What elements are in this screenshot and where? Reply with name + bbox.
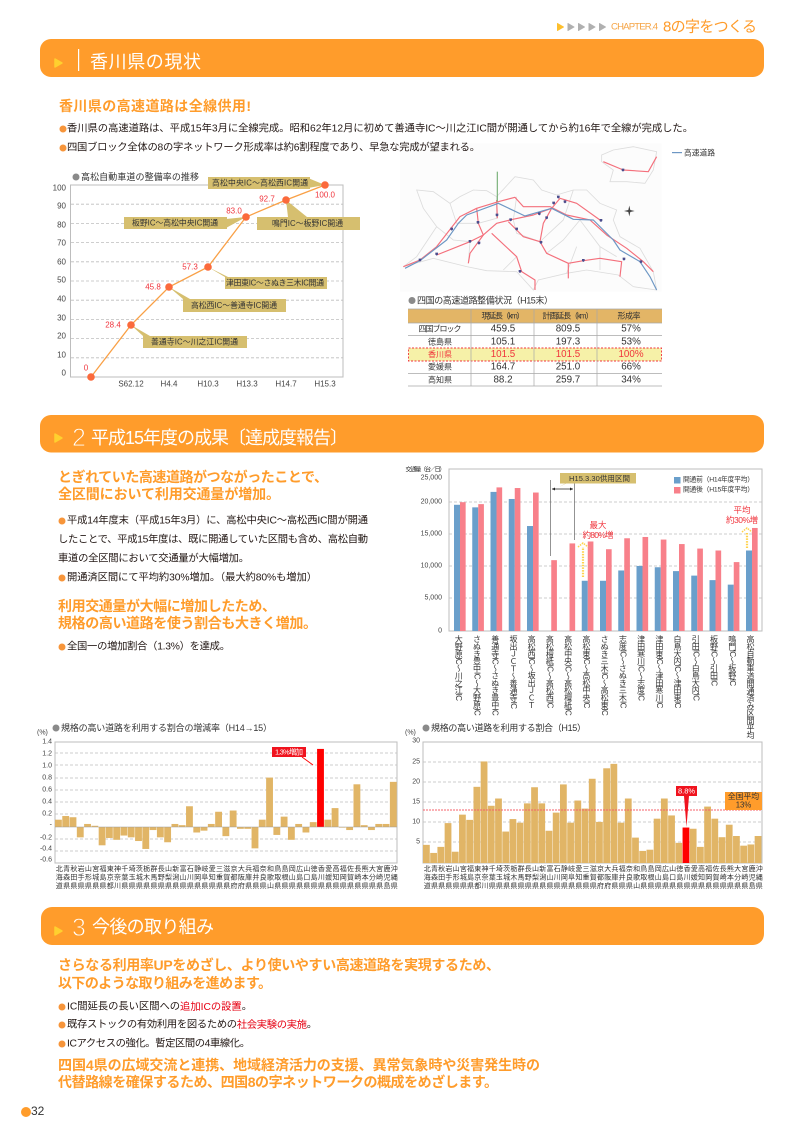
prefecture labels: change chart: 富山県 <box>179 864 186 890</box>
y axis labels: 0 <box>438 628 442 634</box>
prefecture labels: share chart: 兵庫県 <box>611 864 618 890</box>
prefecture labels: change chart: 北海道 <box>55 864 62 890</box>
prefecture labels: change chart: 兵庫県 <box>245 864 252 890</box>
callout text: 津田東IC～さぬき三木IC開通 <box>226 278 324 288</box>
y axis labels <box>421 474 442 634</box>
section 1 bullet list: 香川県の高速道路は、平成15年3月に全線完成。昭和62年12月に初めて善通寺IC～川之江IC間が開通してから約16年で全線が完成した。 <box>67 122 693 134</box>
callout national average: 全国平均 <box>728 791 759 801</box>
prefecture labels: change chart: 鹿児島 <box>383 864 390 890</box>
bars before opening <box>454 492 752 631</box>
prefecture labels: share chart: 栃木県 <box>510 864 517 890</box>
legend: 開通後（H15年度平均） <box>683 484 754 494</box>
table cells: 34% <box>621 374 641 386</box>
prefecture labels: change chart: 大阪府 <box>237 864 244 890</box>
prefecture labels: change chart: 栃木県 <box>143 864 150 890</box>
prefecture labels: change chart: 福井県 <box>252 864 259 890</box>
section 3 banner: 今後の取り組み <box>92 917 214 937</box>
y axis labels: 20 <box>412 778 420 786</box>
x axis labels: H15.3 <box>314 380 336 388</box>
annotation: max 80 percent and average 30 percent: 約30%増 <box>726 515 758 525</box>
prefecture labels: change chart: 愛媛県 <box>325 864 332 890</box>
prefecture labels: change chart: 沖縄県 <box>390 864 397 890</box>
table cells: 66% <box>621 362 641 372</box>
section 1 banner: 香川県の現状 <box>90 52 201 72</box>
traffic chart road section labels: 鳴門IC～板野IC <box>728 635 737 686</box>
prefecture labels: share chart: 山口県 <box>669 864 676 890</box>
annotation: max 80 percent and average 30 percent: 最大 <box>589 520 607 530</box>
y axis labels: 1.0 <box>42 762 52 770</box>
traffic chart road section labels: 高松檀紙IC～高松西IC <box>545 635 554 708</box>
prefecture labels: share chart: 三重県 <box>582 864 589 890</box>
chart title: 規格の高い道路を利用する割合の増減率（H14→15） <box>61 722 272 733</box>
data values: 83.0 <box>226 206 242 216</box>
y axis labels: 20 <box>57 332 67 340</box>
table cells: 164.7 <box>491 362 515 372</box>
prefecture labels: change chart: 鳥取県 <box>274 864 281 890</box>
prefecture labels: share chart: 鹿児島 <box>748 864 755 890</box>
callouts <box>124 177 360 348</box>
prefecture labels: change chart: 奈良県 <box>259 864 266 890</box>
callout text: 高松中央IC～高松西IC開通 <box>212 178 308 188</box>
prefecture labels: change chart: 岩手県 <box>77 864 84 890</box>
y axis labels: 0.2 <box>42 810 52 818</box>
section 1 banner <box>40 39 764 77</box>
y axis labels: 10 <box>412 818 420 826</box>
table cells: 53% <box>621 336 641 348</box>
section 2 body text: 車道の全区間において交通量が大幅増加。 <box>58 552 249 564</box>
prefecture labels: change chart: 徳島県 <box>310 864 317 890</box>
section 2 banner: 平成15年度の成果〔達成度報告〕 <box>91 428 348 448</box>
prefecture labels: change chart: 大分県 <box>368 864 375 890</box>
prefecture labels: share chart: 岡山県 <box>654 864 661 890</box>
prefecture labels: share chart: 愛知県 <box>575 864 582 890</box>
y axis labels: 60 <box>57 258 67 266</box>
section 2 lead text: 全区間において利用交通量が増加。 <box>58 486 280 502</box>
section 2 banner <box>40 415 764 452</box>
table cells: 四国ブロック <box>418 324 462 334</box>
traffic chart road section labels: 高松東IC～高松中央IC <box>582 635 591 708</box>
traffic chart road section labels: 引田IC～白鳥大内IC <box>691 635 700 700</box>
y axis labels: -0.4 <box>40 846 52 852</box>
prefecture labels: change chart: 茨城県 <box>135 864 142 890</box>
annotation: max 80 percent and average 30 percent: 平均 <box>733 505 751 515</box>
data values <box>84 190 336 372</box>
data values: 45.8 <box>145 282 161 292</box>
prefecture labels: share chart: 大分県 <box>734 864 741 890</box>
map of Shikoku expressways <box>400 143 662 292</box>
prefecture labels: share chart: 北海道 <box>423 864 430 890</box>
table caption: 四国の高速道路整備状況（H15末） <box>417 294 553 306</box>
chart title: 規格の高い道路を利用する割合（H15） <box>431 722 586 733</box>
axis title: 交通量（台／日） <box>406 466 446 474</box>
unit: (%) <box>405 730 416 736</box>
zero line <box>55 826 397 828</box>
annotation: max 80 percent and average 30 percent: 約80%増 <box>582 530 614 540</box>
section 3 closing text: 代替路線を確保するため、四国8の字ネットワークの概成をめざします。 <box>58 1074 498 1090</box>
y axis labels: 100 <box>53 184 67 192</box>
traffic chart road section labels: 高松自動車道開通済み区間平均 <box>746 635 755 739</box>
callout national average: 13% <box>736 800 751 810</box>
y axis labels: 1.2 <box>42 750 52 758</box>
table cells: 57% <box>621 324 641 334</box>
table cells: 197.3 <box>556 336 581 348</box>
data values: 28.4 <box>105 320 121 330</box>
section 1 heading: 香川県の高速道路は全線供用! <box>59 98 251 114</box>
traffic chart road section labels: 大野原IC～川之江IC <box>454 635 463 700</box>
y axis labels: 0.6 <box>42 786 52 794</box>
prefecture labels: share chart: 沖縄県 <box>755 864 762 890</box>
prefecture labels: change chart: 長崎県 <box>354 864 361 890</box>
prefecture labels: share chart: 鳥取県 <box>640 864 647 890</box>
y axis labels: -0.6 <box>40 856 52 864</box>
highlighted row <box>408 348 662 361</box>
table cells: 809.5 <box>556 324 581 334</box>
annotation: max 80 percent and average 30 percent <box>578 505 758 577</box>
bar chart: traffic volume <box>406 466 762 634</box>
y axis labels: 1.4 <box>42 738 52 746</box>
opening section marker <box>550 473 636 556</box>
section 2 body text: したことで、平成15年度は、既に開通していた区間も含め、高松自動 <box>58 532 368 546</box>
prefecture labels: change chart: 千葉県 <box>121 864 128 890</box>
table cells: 徳島県 <box>428 336 452 346</box>
prefecture labels: share chart: 広島県 <box>661 864 668 890</box>
callout 1.3 percent: 1.3%増加 <box>275 746 303 756</box>
national average line <box>423 809 762 811</box>
section 2 lead text: とぎれていた高速道路がつながったことで、 <box>58 469 328 485</box>
callout 1.3 percent <box>272 746 313 765</box>
callout 8.8 percent <box>676 786 697 827</box>
section 2 body text <box>58 514 369 584</box>
x axis labels: H14.7 <box>275 380 297 388</box>
prefecture labels: share chart: 石川県 <box>553 864 560 890</box>
section 3 closing text: 四国4県の広域交流と連携、地域経済活力の支援、異常気象時や災害発生時の <box>58 1057 540 1073</box>
section 2 lead text <box>58 469 328 502</box>
y axis labels: 25,000 <box>421 474 442 482</box>
prefecture labels: change chart: 山梨県 <box>164 864 172 890</box>
y axis labels: 10,000 <box>421 562 442 570</box>
bar chart: change in high-standard road share <box>37 722 397 864</box>
prefecture labels: share chart: 秋田県 <box>438 864 445 890</box>
section 3 bullet list: 既存ストックの有効利用を図るための社会実験の実施。 <box>67 1018 317 1030</box>
traffic chart road section labels <box>454 635 755 739</box>
prefecture labels: share chart: 宮崎県 <box>741 864 748 890</box>
unit: (%) <box>37 730 48 736</box>
section 3 closing text <box>58 1057 540 1090</box>
y axis labels <box>53 184 67 378</box>
prefecture labels: change chart: 石川県 <box>186 864 193 890</box>
prefecture labels: share chart: 徳島県 <box>676 864 683 890</box>
chart title: 高松自動車道の整備率の推移 <box>81 171 199 182</box>
y axis labels: - <box>50 822 53 828</box>
table cells: 愛媛県 <box>428 362 452 372</box>
prefecture labels: change chart: 福岡県 <box>339 864 346 890</box>
section 3 bullet list <box>58 1000 317 1050</box>
prefecture labels: share chart: 群馬県 <box>517 864 524 890</box>
traffic chart road section labels: 津田寒川IC～志度IC <box>637 635 646 700</box>
section 3 bullet list: ICアクセスの強化。暫定区間の4車線化。 <box>67 1036 250 1050</box>
prefecture labels: change chart: 静岡県 <box>194 864 201 890</box>
prefecture labels: change chart: 埼玉県 <box>128 864 135 890</box>
section 3 lead text <box>58 957 500 991</box>
line chart: expressway completion rate <box>53 171 360 388</box>
prefecture labels: share chart: 大阪府 <box>604 864 611 890</box>
data values: 92.7 <box>259 194 275 204</box>
table cells: 計画延長（km） <box>542 310 594 320</box>
x axis labels: S62.12 <box>118 380 144 388</box>
table cells: 259.7 <box>556 374 580 386</box>
prefecture labels: share chart: 長野県 <box>524 864 531 890</box>
prefecture labels: share chart: 東京都 <box>474 864 481 890</box>
prefecture labels: change chart: 愛知県 <box>208 864 215 890</box>
prefecture labels: change chart: 宮城県 <box>92 864 99 890</box>
prefecture labels: change chart: 福島県 <box>99 864 106 890</box>
prefecture labels: change chart: 秋田県 <box>70 864 77 890</box>
section 3 banner <box>41 907 764 945</box>
prefecture labels: change chart: 山口県 <box>303 864 310 890</box>
data line <box>91 185 325 377</box>
y axis labels: 0.8 <box>42 774 52 782</box>
table cells <box>418 310 644 386</box>
callout text: 板野IC～高松中央IC開通 <box>132 218 218 228</box>
prefecture labels: change chart: 山形県 <box>84 864 91 890</box>
y axis labels: 0 <box>62 368 67 378</box>
prefecture labels: share chart: 長崎県 <box>719 864 726 890</box>
traffic chart road section labels: さぬき豊中IC～大野原IC <box>472 635 481 715</box>
callout 8.8 percent: 8.8% <box>678 786 695 796</box>
prefecture labels: share chart: 神奈川 <box>481 864 488 890</box>
y axis labels: 30 <box>412 738 420 744</box>
data points <box>87 181 329 381</box>
table cells: 香川県 <box>428 349 452 359</box>
prefecture labels: change chart: 宮崎県 <box>376 864 383 890</box>
section 1 bullet list <box>60 122 693 154</box>
traffic chart road section labels: 高松西IC～坂出ＪＣＴ <box>527 635 536 708</box>
section 2 banner: 2 <box>72 424 86 452</box>
section 3 lead text: さらなる利用率UPをめざし、より使いやすい高速道路を実現するため、 <box>58 957 500 973</box>
prefecture labels: share chart: 福井県 <box>618 864 625 890</box>
traffic chart road section labels: 白鳥大内IC～津田東IC <box>673 635 682 708</box>
prefecture labels: share chart: 香川県 <box>683 864 690 890</box>
prefecture labels: share chart: 茨城県 <box>503 864 510 890</box>
section 3 banner: 3 <box>72 914 86 942</box>
y axis labels: 15,000 <box>421 530 442 538</box>
prefecture labels: change chart: 和歌山 <box>266 864 273 890</box>
callout text <box>132 178 343 346</box>
y axis labels: 20,000 <box>421 498 442 506</box>
y axis labels: 70 <box>57 238 67 248</box>
prefecture labels: change chart: 島根県 <box>281 864 288 890</box>
section 1 bullet list: 四国ブロック全体の8の字ネットワーク形成率は約6割程度であり、早急な完成が望まれる。 <box>67 140 480 154</box>
y axis labels: 5,000 <box>424 594 442 602</box>
prefecture labels: share chart: 福島県 <box>467 864 474 890</box>
section 2 body text: 平成14年度末（平成15年3月）に、高松中央IC～高松西IC間が開通 <box>67 514 369 526</box>
prefecture labels: share chart: 京都府 <box>596 864 603 890</box>
callout national average <box>725 791 762 810</box>
prefecture labels: share chart: 岐阜県 <box>568 864 575 890</box>
prefecture labels: share chart: 静岡県 <box>560 864 567 890</box>
table: Shikoku expressway status <box>408 309 662 386</box>
prefecture labels: change chart: 群馬県 <box>150 864 157 890</box>
page number: 32 <box>31 1104 45 1118</box>
traffic chart road section labels: さぬき三木IC～高松東IC <box>600 635 609 715</box>
data values: 57.3 <box>182 262 198 272</box>
prefecture labels: share chart: 福岡県 <box>705 864 712 890</box>
table cells: 101.5 <box>556 349 581 360</box>
callout text: 鳴門IC～板野IC開通 <box>272 218 343 228</box>
section 2 second lead text: 規格の高い道路を使う割合も大きく増加。 <box>58 615 317 631</box>
map legend: 高速道路 <box>684 148 715 158</box>
bars <box>55 749 397 849</box>
prefecture labels: change chart: 岡山県 <box>288 864 295 890</box>
section 2 second lead text: 利用交通量が大幅に増加したため、 <box>58 598 276 614</box>
table cells: 形成率 <box>618 310 640 320</box>
callout text: 善通寺IC～川之江IC開通 <box>151 336 238 346</box>
legend <box>674 474 754 494</box>
opening section marker: H15.3.30供用区間 <box>569 473 630 483</box>
y axis labels: 15 <box>412 798 420 806</box>
data values: 100.0 <box>315 190 336 200</box>
section 3 bullet list: IC間延長の長い区間への追加ICの設置。 <box>67 1000 252 1012</box>
prefecture labels: change chart: 香川県 <box>317 864 324 890</box>
prefecture labels: share chart: 千葉県 <box>488 864 495 890</box>
prefecture labels: share chart: 愛媛県 <box>690 864 697 890</box>
section 3 lead text: 以下のような取り組みを進めます。 <box>58 975 272 991</box>
prefecture labels: change chart: 東京都 <box>106 864 113 890</box>
section 2 closing bullet: 全国一の増加割合（1.3%）を達成。 <box>67 640 230 652</box>
prefecture labels: change chart: 青森県 <box>63 864 70 890</box>
chapter header: 8の字をつくる <box>663 18 757 36</box>
y axis labels: 50 <box>57 276 67 284</box>
table cells: 459.5 <box>491 324 516 334</box>
table cells: 105.1 <box>491 336 515 348</box>
prefecture labels: share chart: 高知県 <box>698 864 705 890</box>
x axis labels <box>118 380 336 388</box>
prefecture labels: change chart: 熊本県 <box>361 864 368 890</box>
prefecture labels: share chart: 新潟県 <box>539 864 546 890</box>
page number <box>21 1104 45 1118</box>
callout text: 高松西IC～善通寺IC開通 <box>191 300 277 310</box>
traffic chart road section labels: 板野IC～引田IC <box>710 635 719 686</box>
prefecture labels: change chart: 滋賀県 <box>223 864 230 890</box>
prefecture labels: share chart: 島根県 <box>647 864 654 890</box>
chapter header: CHAPTER.4 <box>611 22 658 32</box>
legend: 開通前（H14年度平均） <box>683 474 754 484</box>
x axis labels: H13.3 <box>236 380 258 388</box>
prefecture labels: share chart: 宮城県 <box>459 864 466 890</box>
y axis labels: 5 <box>416 838 420 846</box>
traffic chart road section labels: 善通寺IC～さぬき豊中IC <box>491 635 500 715</box>
y axis labels: 10 <box>57 350 67 360</box>
bar chart: high-standard road share <box>405 722 762 863</box>
prefecture labels: share chart: 熊本県 <box>726 864 733 890</box>
prefecture labels: change chart: 佐賀県 <box>347 864 354 890</box>
prefecture labels: share chart: 青森県 <box>430 864 437 890</box>
y axis labels: 30 <box>57 314 67 322</box>
table cells: 現延長（km） <box>482 310 524 320</box>
prefecture labels: change chart: 京都府 <box>230 864 237 890</box>
prefecture labels: change chart: 岐阜県 <box>201 864 208 890</box>
prefecture labels: share chart: 奈良県 <box>625 864 632 890</box>
x axis labels: H4.4 <box>161 380 178 388</box>
prefecture labels: share chart: 岩手県 <box>445 864 452 890</box>
y axis labels <box>40 738 53 864</box>
prefecture labels: change chart: 高知県 <box>332 864 339 890</box>
prefecture labels: change chart: 新潟県 <box>172 864 179 890</box>
prefecture labels: change chart <box>55 864 398 890</box>
prefecture labels: share chart: 和歌山 <box>633 864 640 890</box>
y axis labels: 80 <box>57 220 67 230</box>
table cells: 88.2 <box>493 374 513 386</box>
section 2 second lead text <box>58 598 317 631</box>
y axis labels: 90 <box>57 202 67 210</box>
traffic chart road section labels: 津田東IC～津田寒川IC <box>655 635 664 708</box>
traffic chart road section labels: 高松中央IC～高松檀紙IC <box>564 635 573 715</box>
data values: 0 <box>84 364 89 372</box>
traffic chart road section labels: 坂出ＪＣＴ～善通寺IC <box>509 635 518 708</box>
prefecture labels: share chart: 滋賀県 <box>589 864 596 890</box>
table cells: 251.0 <box>556 362 581 372</box>
y axis labels: 0.4 <box>42 798 52 806</box>
y axis labels <box>412 738 420 846</box>
chapter header <box>558 18 757 36</box>
prefecture labels: change chart: 長野県 <box>157 864 164 890</box>
prefecture labels: share chart: 山形県 <box>452 864 459 890</box>
bars after opening <box>460 487 758 631</box>
prefecture labels: change chart: 神奈川 <box>114 864 121 890</box>
prefecture labels: change chart: 三重県 <box>215 864 222 890</box>
prefecture labels: share chart: 山梨県 <box>532 864 538 890</box>
prefecture labels: share chart: 富山県 <box>546 864 553 890</box>
y axis labels: -0.2 <box>40 834 52 842</box>
prefecture labels: share chart: 佐賀県 <box>712 864 719 890</box>
prefecture labels: share chart: 埼玉県 <box>495 864 502 890</box>
section 2 body text: 開通済区間にて平均約30%増加。（最大約80%も増加） <box>67 570 317 584</box>
y axis labels: 25 <box>412 758 420 766</box>
table cells: 高知県 <box>428 374 452 384</box>
prefecture labels: share chart <box>423 864 763 890</box>
table cells: 101.5 <box>491 349 516 360</box>
table cells: 100% <box>618 349 644 360</box>
map legend <box>672 148 715 158</box>
bars <box>423 761 761 863</box>
x axis labels: H10.3 <box>197 380 219 388</box>
y axis labels: 40 <box>57 294 67 304</box>
prefecture labels: change chart: 広島県 <box>296 864 303 890</box>
traffic chart road section labels: 志度IC～さぬき三木IC <box>618 635 627 708</box>
